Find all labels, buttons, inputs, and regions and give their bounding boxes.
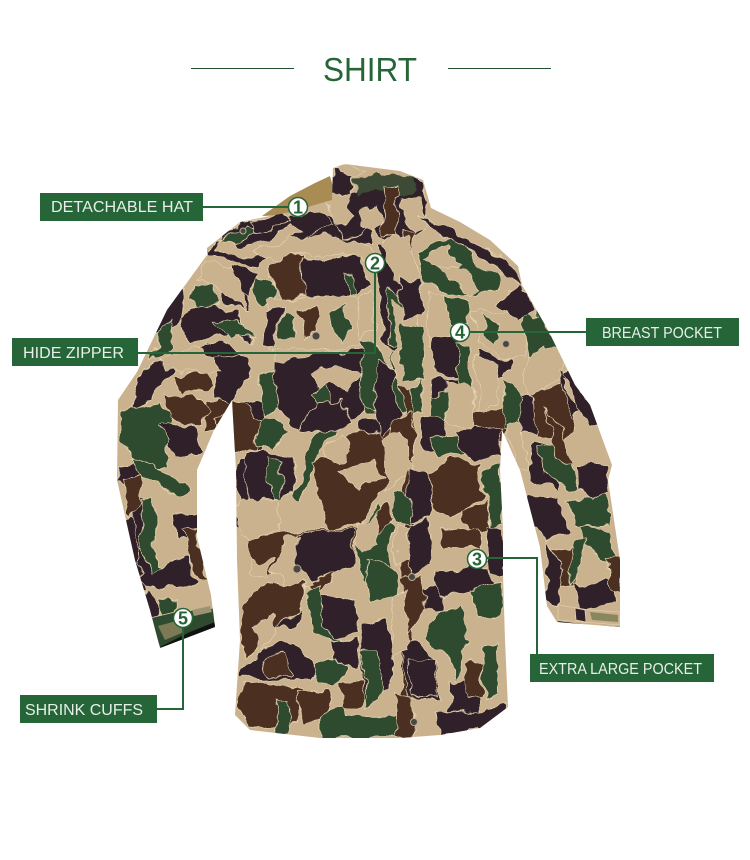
callout 5: shrink cuffs: 5 (178, 608, 188, 628)
right lower body (410, 428, 506, 736)
callout 1: detachable hat: 1 (293, 198, 303, 218)
big pocket (240, 502, 404, 738)
callout 2: hide zipper: 2 (370, 254, 380, 274)
left lower body (236, 400, 395, 540)
callout 2: hide zipper (12, 254, 384, 366)
callout 2: hide zipper: HIDE ZIPPER (23, 345, 124, 362)
label box (12, 338, 138, 366)
label box (530, 654, 714, 682)
callout 5: shrink cuffs: SHRINK CUFFS (25, 702, 143, 719)
sleeve upper (118, 305, 252, 622)
callout 3: extra large pocket: 3 (472, 550, 482, 570)
label box (586, 318, 739, 346)
right sleeve lower (505, 372, 622, 606)
callout 1: detachable hat: DETACHABLE HAT (51, 199, 193, 216)
collar (328, 164, 430, 245)
callout 4: breast pocket: BREAST POCKET (602, 325, 722, 342)
underlying dark patches (120, 215, 612, 712)
jacket photo illustration (117, 164, 620, 738)
label box (40, 193, 203, 221)
label box (20, 695, 157, 723)
left chest (188, 250, 370, 310)
left pocket and middle body (200, 290, 392, 455)
cuff right (557, 605, 620, 627)
callout 4: breast pocket: 4 (455, 322, 465, 342)
hood lining behind shoulder (262, 176, 338, 216)
snap buttons (240, 228, 510, 726)
callout 1: detachable hat (40, 193, 308, 221)
placket centre (375, 230, 438, 738)
cuff left (150, 606, 216, 650)
callout 3: extra large pocket (468, 550, 714, 682)
callout 3: extra large pocket: EXTRA LARGE POCKET (539, 661, 702, 678)
right chest (398, 218, 596, 450)
callout 4: breast pocket (450, 318, 739, 346)
callout 5: shrink cuffs (20, 608, 192, 723)
title: SHIRT (323, 51, 417, 88)
camouflage jacket body (117, 164, 620, 738)
shoulder band and epaulette (208, 212, 375, 265)
